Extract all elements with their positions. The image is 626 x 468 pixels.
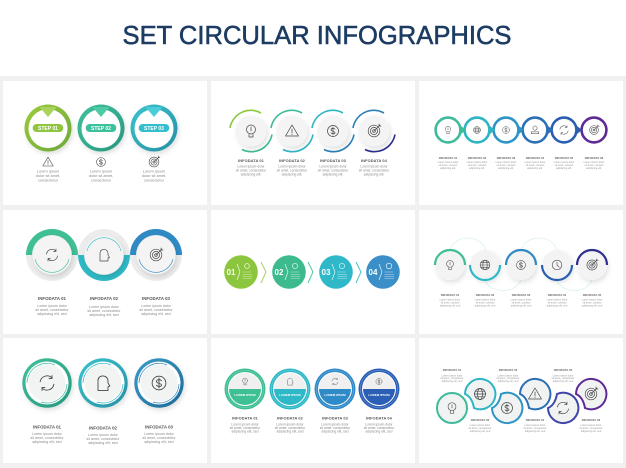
labels: sit amet, consectetur <box>30 436 64 440</box>
title: SET CIRCULAR INFOGRAPHICS <box>122 20 512 50</box>
labels: Lorem ipsum dolor <box>554 161 575 164</box>
labels: adipiscing elit, sed <box>232 430 259 434</box>
disc 03: 03 <box>322 268 331 277</box>
labels: sit amet, consectetur <box>275 426 306 430</box>
upper labels: INFODATA 01 <box>443 368 462 372</box>
labels: adipiscing elit, sed <box>89 313 119 317</box>
step 02 text: dolor sit amet, <box>89 173 113 178</box>
step 01 circle <box>24 104 72 152</box>
labels <box>236 158 390 176</box>
lower labels: INFODATA 04 <box>526 418 545 422</box>
upper labels: Lorem ipsum dolor <box>498 374 519 378</box>
labels: INFODATA 02 <box>277 416 304 420</box>
labels: adipiscing elit, sed <box>32 440 62 444</box>
labels: adipiscing elit, sed <box>37 312 67 316</box>
labels: adipiscing elit. <box>241 172 261 176</box>
lower labels <box>468 418 603 433</box>
ring 01 <box>436 118 460 142</box>
labels: adipiscing elit. <box>469 167 485 170</box>
labels: adipiscing elit. <box>527 167 543 170</box>
labels: adipiscing elit, sed <box>88 441 118 445</box>
panel: four half-filled circles <box>211 338 415 463</box>
upper labels <box>440 368 575 383</box>
labels: Lorem ipsum dolor <box>276 422 305 426</box>
labels: INFODATA 06 <box>585 156 604 160</box>
disc 04: 04 <box>369 268 378 277</box>
upper labels: sit amet, consectetur <box>496 377 520 380</box>
labels: sit amet, consectetur <box>87 309 121 313</box>
labels: sit amet, consect <box>585 164 604 167</box>
icon: warning <box>43 157 53 166</box>
lower labels: sit amet, consectetur <box>579 427 603 430</box>
upper labels: INFODATA 03 <box>499 368 518 372</box>
step 01 text: dolor sit amet, <box>36 173 60 178</box>
labels: Lorem ipsum dolor <box>321 422 350 426</box>
disc 01 <box>224 255 258 289</box>
labels: Lorem ipsum dolor <box>438 161 459 164</box>
circle 04 <box>520 379 550 409</box>
ring 04 <box>523 118 547 142</box>
circle 02 <box>465 379 495 409</box>
circle 02 <box>470 250 500 280</box>
labels: sit amet, consectetur <box>86 437 120 441</box>
labels: Lorem ipsum dolor <box>467 161 488 164</box>
labels: adipiscing elit. <box>556 167 572 170</box>
upper labels: Lorem ipsum dolor <box>442 374 463 378</box>
step 02 text: consectetur <box>91 178 112 183</box>
labels: sit amet, consect <box>441 302 460 304</box>
labels: sit amet, consect <box>512 302 531 304</box>
panel: six notched circles in zigzag <box>419 338 623 463</box>
labels: INFODATA 04 <box>361 158 388 163</box>
labels: sit amet, consectetur <box>320 426 351 430</box>
labels: INFODATA 02 <box>89 426 118 430</box>
labels: Lorem ipsum dolor <box>237 164 266 168</box>
labels: adipiscing elit. <box>440 167 456 170</box>
ring 02 <box>465 118 489 142</box>
labels: adipiscing elit. <box>282 172 302 176</box>
circle 01 <box>26 229 78 281</box>
item 04 <box>353 110 395 152</box>
labels: INFODATA 03 <box>320 158 347 163</box>
ring 05 <box>552 118 576 142</box>
panel: six ring chain <box>419 81 623 205</box>
step 03 text: consectetur <box>144 178 165 183</box>
lower labels: Lorem ipsum dolor <box>525 424 546 427</box>
circle 02 <box>78 229 130 281</box>
circle 05 <box>577 250 607 280</box>
labels: Lorem ipsum dolor <box>525 161 546 164</box>
labels: sit amet, consect <box>583 302 602 304</box>
step 02 circle: STEP 02 <box>91 126 111 132</box>
labels: Lorem ipsum dolor <box>231 422 260 426</box>
upper labels: adipiscing elit, sed <box>498 380 519 383</box>
labels: INFODATA 01 <box>441 293 460 297</box>
labels: sit amet, consectetur <box>364 426 395 430</box>
panel: three half-arc circles <box>3 210 207 334</box>
labels: INFODATA 02 <box>468 156 487 160</box>
disc 04 <box>366 255 400 289</box>
upper labels: Lorem ipsum dolor <box>553 374 574 378</box>
labels: Lorem ipsum dolor <box>584 161 605 164</box>
labels <box>30 424 176 445</box>
labels: INFODATA 03 <box>497 156 516 160</box>
icon: dollar <box>97 158 105 166</box>
circle 04 <box>542 250 572 280</box>
labels: INFODATA 04 <box>366 416 393 420</box>
disc 01: 01 <box>227 268 236 277</box>
labels: sit amet, consect <box>468 164 487 167</box>
labels: adipiscing elit. <box>323 172 343 176</box>
labels: INFODATA 03 <box>322 416 349 420</box>
circle 01 <box>435 250 465 280</box>
circle 04 <box>358 368 400 410</box>
labels: adipiscing elit, sed <box>144 440 174 444</box>
labels: Lorem ipsum dolor <box>440 298 461 302</box>
labels <box>230 416 395 434</box>
panel: five circles linked by dashed curves <box>419 210 623 334</box>
labels: adipiscing elit, sed <box>141 312 171 316</box>
labels: adipiscing elit, sed <box>547 304 568 308</box>
circle 03 <box>134 358 184 408</box>
step 01 text: consectetur <box>38 178 59 183</box>
labels: adipiscing elit, sed <box>475 304 496 308</box>
step 03 text: Lorem ipsum <box>143 168 165 173</box>
lower labels: adipiscing elit, sed <box>525 430 546 433</box>
labels: adipiscing elit, sed <box>440 304 461 308</box>
step 01 text: Lorem ipsum <box>37 168 59 173</box>
dashed connectors <box>450 238 592 290</box>
labels: Lorem ipsum dolor <box>475 298 496 302</box>
labels: Lorem ipsum dolor <box>365 422 394 426</box>
labels: sit amet, consectetur <box>318 168 349 172</box>
upper labels: sit amet, consectetur <box>440 377 464 380</box>
labels: INFODATA 01 <box>38 296 67 301</box>
labels: sit amet, consect <box>548 302 567 304</box>
labels: sit amet, consectetur <box>359 168 390 172</box>
labels: Lorem ipsum dolor <box>144 432 175 436</box>
lower labels: INFODATA 02 <box>471 418 490 422</box>
labels: INFODATA 02 <box>279 158 306 163</box>
labels: Lorem ipsum dolor <box>32 432 63 436</box>
labels: INFODATA 03 <box>145 424 174 430</box>
circle 03 <box>130 229 182 281</box>
labels: sit amet, consectetur <box>139 308 173 312</box>
labels: INFODATA 03 <box>512 293 531 297</box>
labels: adipiscing elit, sed <box>277 430 304 434</box>
lower labels: Lorem ipsum dolor <box>470 424 491 427</box>
circle 01 <box>22 358 72 408</box>
disc 03 <box>319 255 353 289</box>
lower labels: Lorem ipsum dolor <box>581 424 602 427</box>
labels: Lorem ipsum dolor <box>582 298 603 302</box>
labels: Lorem ipsum dolor <box>496 161 517 164</box>
step 02 circle <box>78 104 124 152</box>
circle 03 <box>314 368 356 410</box>
lower labels: INFODATA 06 <box>582 418 601 422</box>
labels: INFODATA 03 <box>142 296 171 301</box>
labels: sit amet, consectetur <box>142 436 176 440</box>
upper labels: INFODATA 05 <box>554 368 573 372</box>
panel: four raised circles with arcs <box>211 81 415 205</box>
circle 05 <box>548 393 578 423</box>
disc 02 <box>272 255 306 289</box>
circle 02: LOREM IPSUM <box>279 393 301 397</box>
upper labels: adipiscing elit, sed <box>553 380 574 383</box>
labels: Lorem ipsum dolor <box>141 304 172 308</box>
step 02 text: Lorem ipsum <box>90 168 112 173</box>
step 03 circle: STEP 03 <box>144 126 164 132</box>
labels: sit amet, consect <box>476 302 495 304</box>
labels: adipiscing elit, sed <box>582 304 603 308</box>
labels: adipiscing elit, sed <box>366 430 393 434</box>
labels: adipiscing elit. <box>364 172 384 176</box>
labels: adipiscing elit. <box>498 167 514 170</box>
arrow chevrons <box>261 262 361 283</box>
labels: INFODATA 02 <box>90 296 119 301</box>
panel: numbered discs with chevrons <box>211 210 415 334</box>
labels: INFODATA 01 <box>439 156 458 160</box>
lower labels: adipiscing elit, sed <box>581 430 602 433</box>
labels: adipiscing elit. <box>586 167 602 170</box>
item 03 <box>312 110 354 152</box>
labels: Lorem ipsum dolor <box>278 164 307 168</box>
labels: sit amet, consectetur <box>277 168 308 172</box>
labels: Lorem ipsum dolor <box>37 304 68 308</box>
panel: three step circles <box>3 81 207 205</box>
circle 03: LOREM IPSUM <box>324 393 346 397</box>
item 02 <box>271 110 313 152</box>
circle 03 <box>506 250 536 280</box>
circle 01 <box>224 368 266 410</box>
circle 03 <box>492 393 522 423</box>
disc 02: 02 <box>275 268 284 277</box>
step 03 text: dolor sit amet, <box>142 173 166 178</box>
labels: Lorem ipsum dolor <box>88 433 119 437</box>
circle 02 <box>78 358 128 408</box>
ring 06 <box>582 118 606 142</box>
labels: sit amet, consect <box>555 164 574 167</box>
circle 06 <box>576 379 606 409</box>
lower labels: sit amet, consectetur <box>468 427 492 430</box>
labels: sit amet, consect <box>497 164 516 167</box>
upper labels: adipiscing elit, sed <box>442 380 463 383</box>
labels: INFODATA 02 <box>476 293 495 297</box>
icon: target <box>149 156 160 167</box>
labels: Lorem ipsum dolor <box>511 298 532 302</box>
step 01 circle: STEP 01 <box>38 126 58 132</box>
labels: INFODATA 05 <box>555 156 574 160</box>
ring 03 <box>494 118 518 142</box>
panel: three ringed circles <box>3 338 207 463</box>
circle 01 <box>437 393 467 423</box>
circle 04: LOREM IPSUM <box>368 393 390 397</box>
labels: INFODATA 04 <box>526 156 545 160</box>
item 01 <box>230 110 272 152</box>
ring pointers <box>461 126 582 134</box>
labels <box>438 156 605 170</box>
labels <box>440 293 603 308</box>
step 03 circle <box>130 104 178 152</box>
labels: Lorem ipsum dolor <box>360 164 389 168</box>
lower labels: sit amet, consectetur <box>523 427 547 430</box>
labels: INFODATA 01 <box>232 416 259 420</box>
labels: sit amet, consect <box>526 164 545 167</box>
labels: adipiscing elit, sed <box>511 304 532 308</box>
labels: Lorem ipsum dolor <box>89 305 120 309</box>
labels: adipiscing elit, sed <box>322 430 349 434</box>
labels: sit amet, consectetur <box>230 426 261 430</box>
labels: Lorem ipsum dolor <box>319 164 348 168</box>
labels: INFODATA 01 <box>238 158 265 163</box>
labels: sit amet, consectetur <box>236 168 267 172</box>
labels <box>35 296 173 317</box>
circle 01: LOREM IPSUM <box>234 393 256 397</box>
upper labels: sit amet, consectetur <box>551 377 575 380</box>
labels: INFODATA 05 <box>583 293 602 297</box>
circle 02 <box>270 368 310 410</box>
labels: INFODATA 04 <box>548 293 567 297</box>
labels: sit amet, consect <box>439 164 458 167</box>
lower labels: adipiscing elit, sed <box>470 430 491 433</box>
labels: Lorem ipsum dolor <box>547 298 568 302</box>
labels: sit amet, consectetur <box>35 308 69 312</box>
labels: INFODATA 01 <box>33 424 62 430</box>
